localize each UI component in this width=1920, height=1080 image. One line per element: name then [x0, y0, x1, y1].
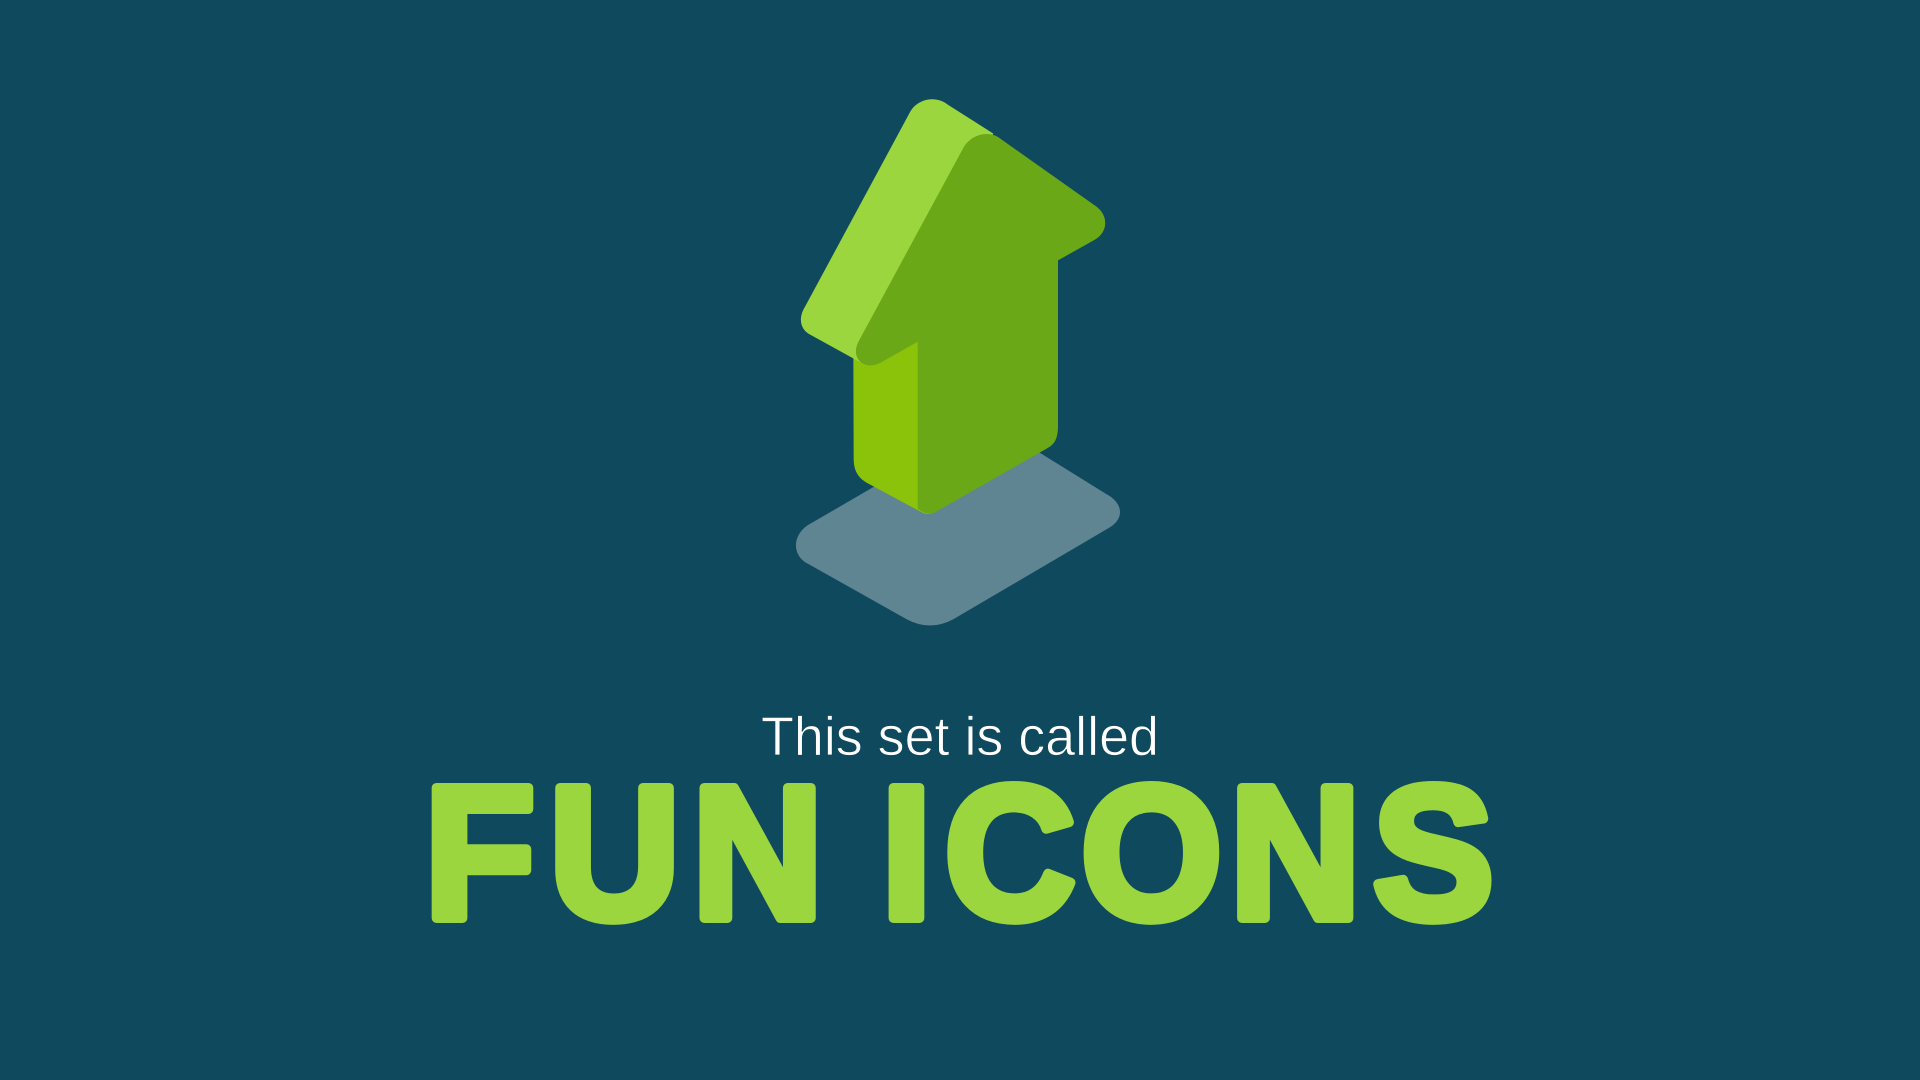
icon: isometric up arrow: [796, 99, 1120, 626]
title: FUN ICONS: [424, 748, 1494, 959]
arrow head top face: [801, 99, 993, 362]
arrow shaft side face: [853, 337, 933, 514]
arrow ground shadow: [796, 403, 1120, 626]
arrow front face: [856, 134, 1105, 514]
subtitle: This set is called: [761, 705, 1159, 767]
